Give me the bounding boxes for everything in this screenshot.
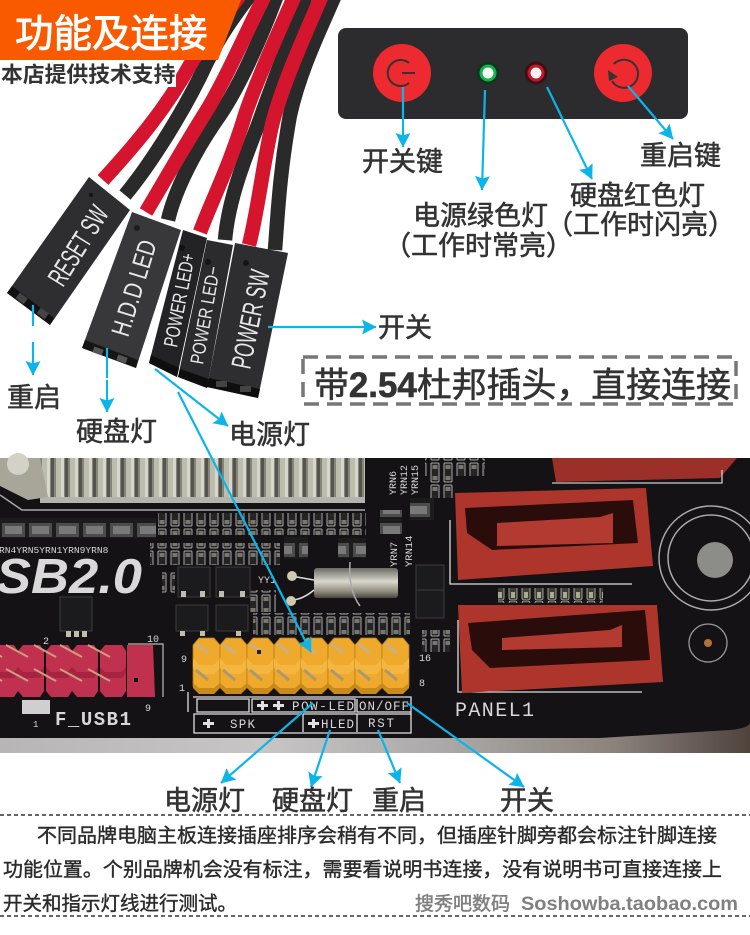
yellow front panel header — [193, 638, 409, 694]
connector: RESET SW: RESET SW — [42, 200, 115, 291]
panel: front switch panel — [338, 28, 688, 119]
label: board switch: 开关 — [500, 786, 554, 816]
SATA connectors — [450, 458, 737, 693]
label: hdd LED: 硬盘灯 — [76, 417, 157, 447]
connector: H.D.D LED — [82, 212, 181, 368]
icon: restart button — [594, 44, 652, 102]
icon: power button — [373, 44, 431, 102]
label: restart key: 重启键 — [640, 141, 721, 171]
silkscreen text: YRN6 — [389, 471, 400, 495]
label: board reset: 重启 — [372, 786, 426, 816]
label: board power LED: 电源灯 — [164, 786, 245, 816]
silkscreen text: F_USB1 — [55, 709, 131, 731]
silkscreen text: 2 — [43, 637, 49, 648]
arrow: board power LED — [221, 703, 313, 783]
silkscreen text: SB2.0 — [0, 550, 142, 604]
crystal — [286, 562, 398, 606]
label: reset: 重启 — [7, 383, 61, 413]
mounting hole — [659, 506, 750, 662]
silkscreen text: 1 — [179, 684, 185, 695]
connector: POWER LED-: POWER LED− — [187, 265, 225, 366]
header pin labels — [188, 692, 411, 733]
label: green LED note: （工作时常亮） — [384, 231, 573, 261]
silkscreen text: YRN7 — [389, 542, 401, 567]
silkscreen text: 9 — [145, 704, 151, 715]
arrow: green LED — [482, 90, 485, 190]
label: red LED: 硬盘红色灯 — [570, 181, 705, 211]
arrow: board reset — [378, 730, 400, 783]
header pin labels: SPK — [230, 718, 255, 732]
arrow: power key — [402, 87, 404, 147]
label: power key: 开关键 — [362, 147, 443, 177]
arrow: hdd connector — [106, 348, 108, 412]
arrow: restart key — [628, 86, 673, 139]
connector: POWER LED- — [178, 240, 233, 388]
silkscreen text: PANEL1 — [455, 700, 534, 723]
photo: motherboard — [0, 453, 750, 753]
text block: note: 不同品牌电脑主板连接插座排序会稍有不同，但插座针脚旁都会标注针脚连接 — [37, 825, 717, 847]
arrow: power switch connector — [268, 326, 376, 328]
silkscreen text: YRN15 — [411, 465, 422, 495]
subtitle — [0, 60, 176, 87]
label: board hdd LED: 硬盘灯 — [272, 786, 353, 816]
heat sink — [0, 453, 365, 510]
chip pads — [66, 591, 245, 637]
label: green LED: 电源绿色灯 — [413, 201, 548, 231]
small component rows — [0, 458, 603, 652]
icon: green power LED — [476, 62, 500, 84]
text block: note — [3, 825, 722, 915]
connector: POWER SW — [207, 243, 288, 398]
silkscreen text: YRN14 — [404, 535, 416, 567]
silkscreen text — [0, 465, 534, 731]
connector: RESET SW — [7, 177, 130, 325]
silkscreen text: YY1 — [258, 576, 276, 587]
plastic strip — [0, 722, 750, 753]
arrow: reset connector — [32, 305, 34, 375]
text block: note: 开关和指示灯线进行测试。 — [3, 893, 237, 915]
arrow: power LED connector — [155, 369, 228, 426]
red USB header — [0, 644, 163, 714]
connector: POWER LED+: POWER LED+ — [160, 252, 200, 349]
silkscreen text: RN4YRN5YRN1YRN9YRN8 — [0, 545, 109, 556]
header pin labels: POW-LED — [292, 700, 354, 714]
watermark: Soshowba.taobao.com — [521, 894, 738, 915]
label: power LED: 电源灯 — [229, 420, 310, 450]
header pin labels: HLED — [321, 718, 354, 732]
arrow: red LED — [547, 87, 592, 179]
arrow: board switch — [407, 703, 524, 787]
silkscreen text: 8 — [419, 679, 425, 690]
connector: POWER LED+ — [149, 230, 207, 377]
silkscreen text: 1 — [33, 720, 38, 730]
chips — [60, 565, 444, 631]
watermark — [415, 893, 738, 915]
connector: POWER SW: POWER SW — [226, 267, 276, 371]
connector: H.D.D LED: H.D.D LED — [105, 236, 163, 340]
watermark: 搜秀吧数码 — [415, 893, 510, 915]
arrow: board hdd LED — [311, 730, 330, 787]
label: red LED note: （工作时闪亮） — [546, 210, 735, 240]
photo: connector cables — [103, 0, 335, 250]
text block: note: 功能位置。个别品牌机会没有标注，需要看说明书连接，没有说明书可直接连接上 — [3, 859, 722, 881]
silkscreen text: 10 — [147, 635, 159, 646]
subtitle text: 本店提供技术支持 — [1, 62, 176, 87]
title banner: 功能及连接 — [15, 13, 208, 56]
icon: red disk LED — [524, 62, 548, 84]
title banner — [0, 0, 241, 60]
label: switch: 开关 — [378, 313, 432, 343]
header pin labels: RST — [368, 717, 394, 731]
silkscreen text: YRN12 — [400, 465, 411, 495]
header pin labels: ON/OFF — [359, 700, 409, 714]
arrow: long power LED arrow to header — [178, 392, 311, 652]
silkscreen text: 9 — [181, 655, 187, 666]
silkscreen text: 16 — [419, 654, 431, 665]
callout: dupont plug: 带2.54杜邦插头，直接连接 — [314, 366, 731, 405]
